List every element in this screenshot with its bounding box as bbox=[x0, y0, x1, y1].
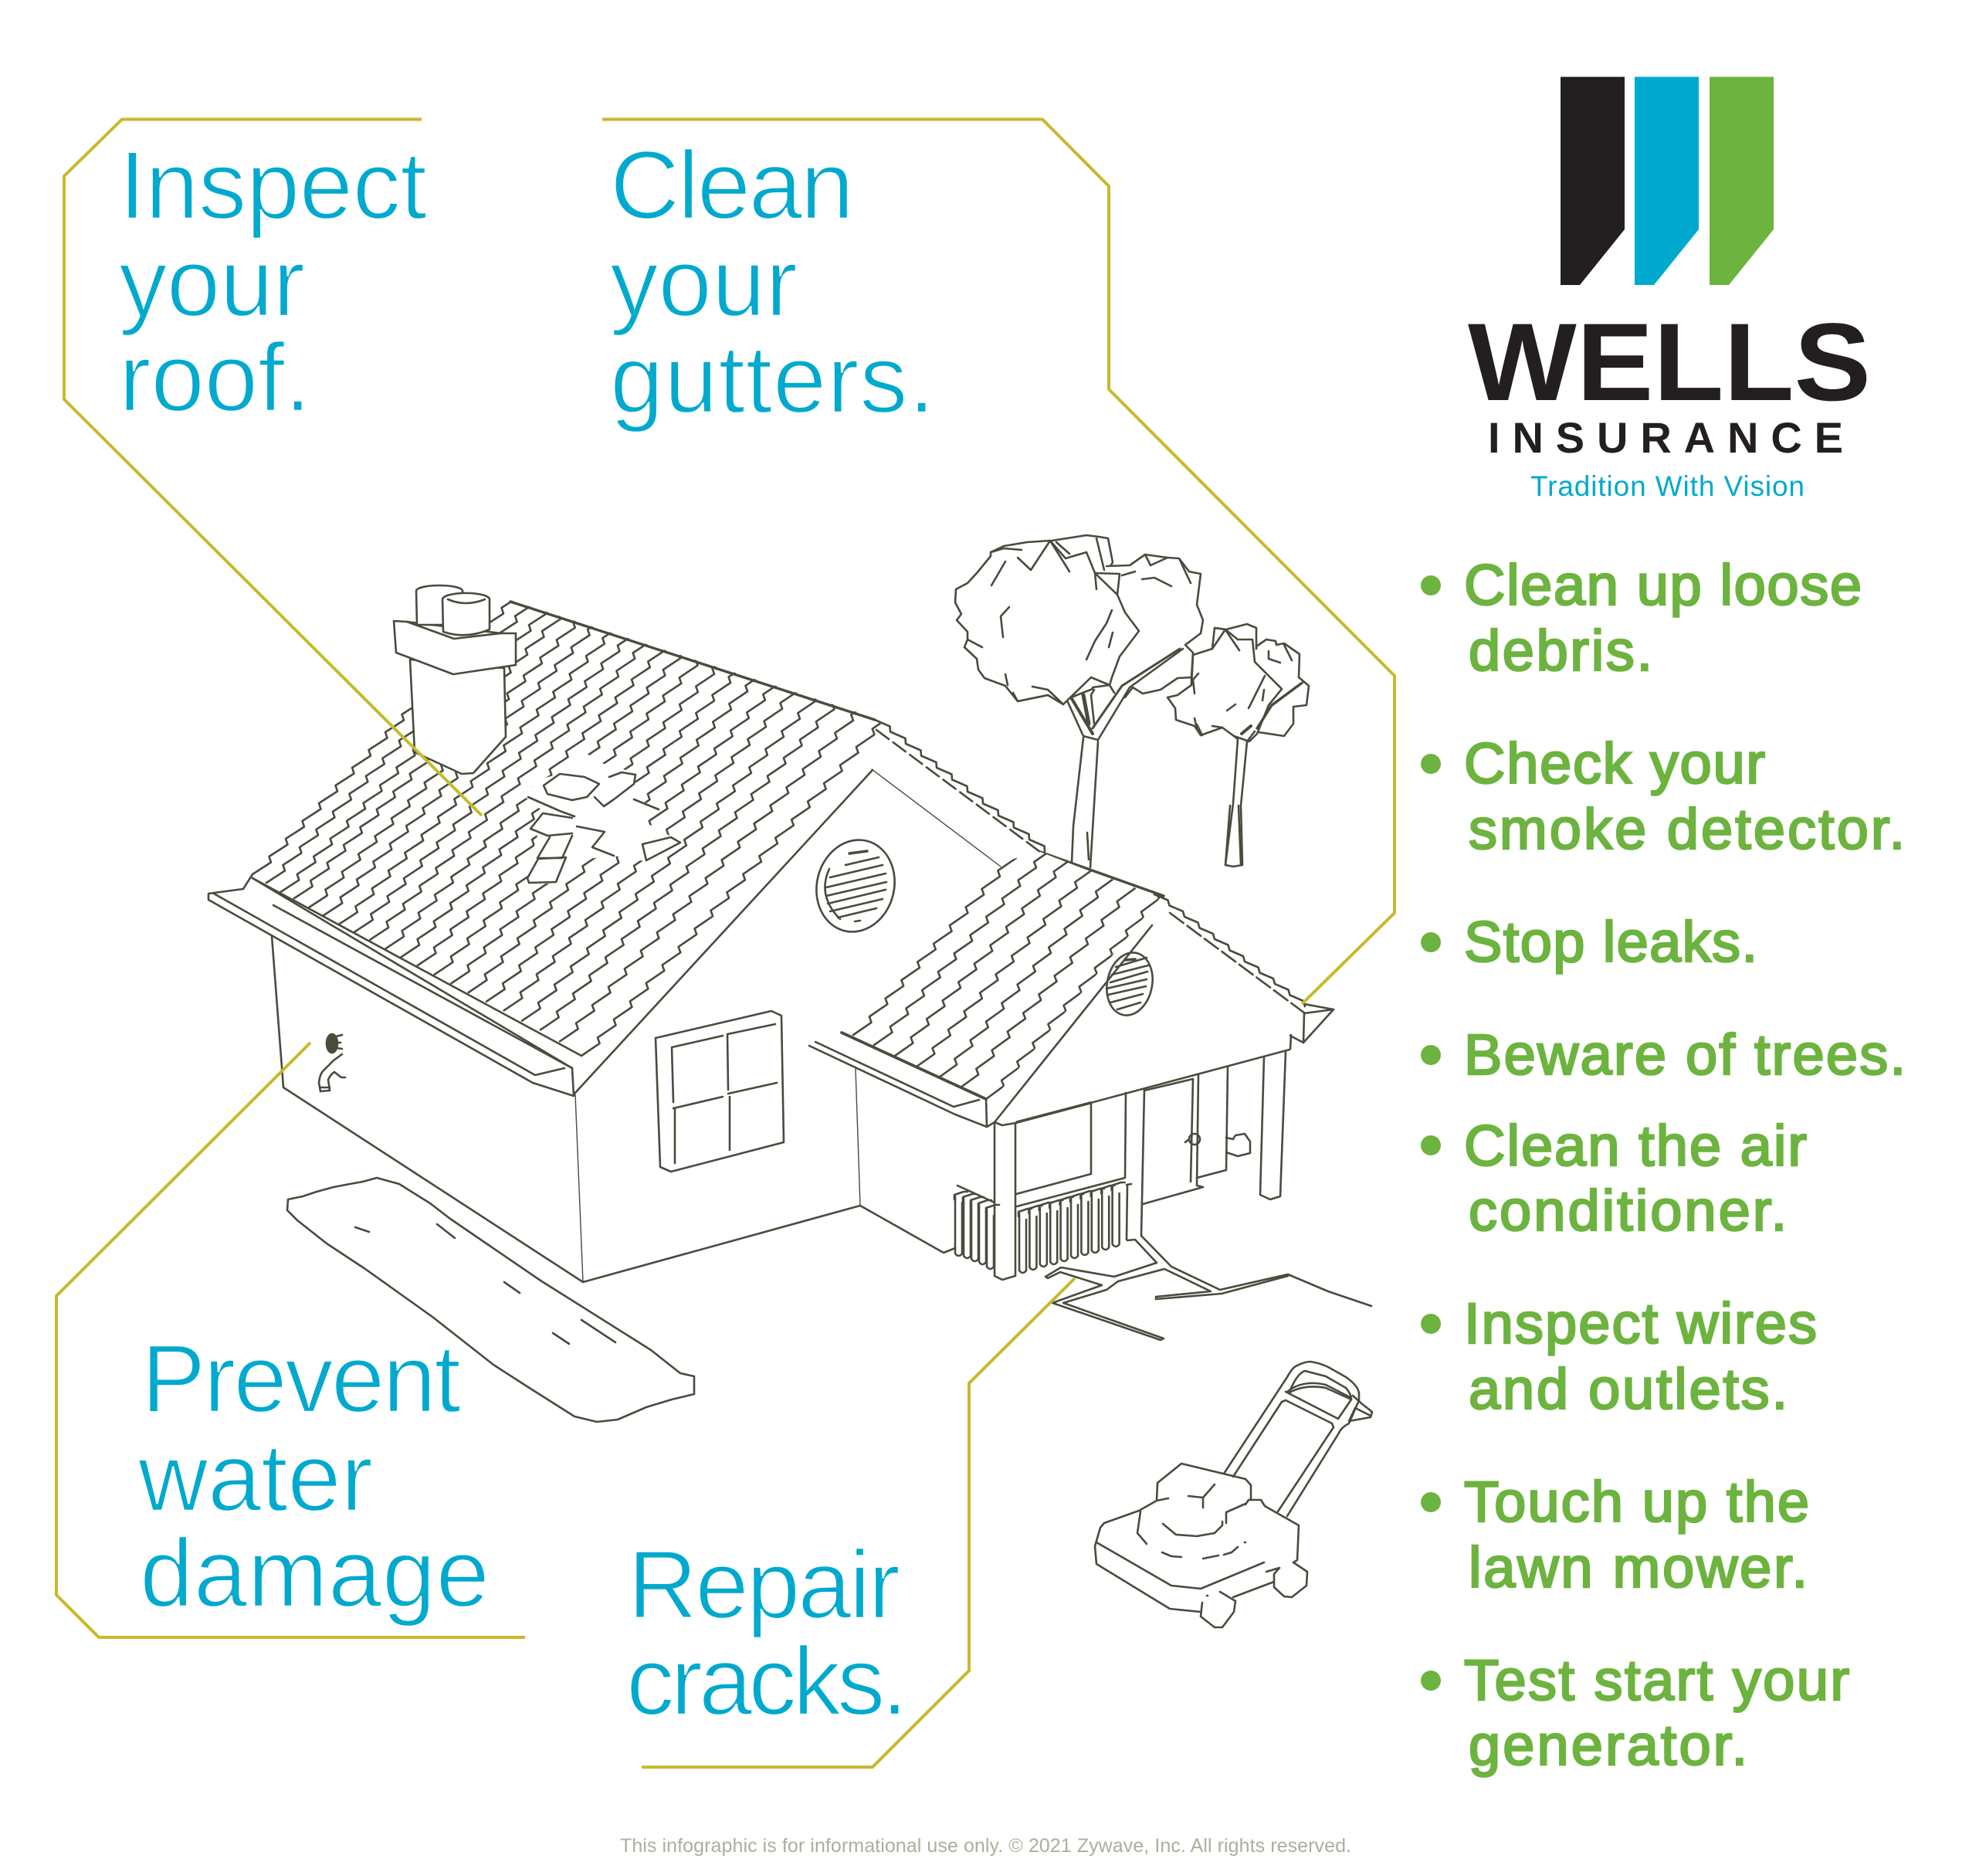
tree canopy: small bbox=[1168, 629, 1282, 741]
list item: stop leaks: Stop leaks. bbox=[1464, 910, 1757, 974]
heading: repair cracks bbox=[626, 1532, 908, 1735]
callout frame: prevent water damage bbox=[56, 1043, 525, 1637]
main canopy details bbox=[968, 541, 1113, 704]
damaged roof patch bbox=[525, 752, 680, 884]
heading: inspect your roof: Inspect bbox=[119, 132, 427, 239]
checklist bbox=[1421, 553, 1906, 1777]
main gable eave steps bbox=[875, 720, 1164, 896]
logo mark: three bars bbox=[1561, 77, 1625, 285]
cracked walkway bbox=[1046, 1236, 1371, 1340]
list item: check smoke detector: smoke detector. bbox=[1469, 797, 1905, 861]
heading: prevent water damage bbox=[137, 1325, 490, 1627]
chimney bbox=[394, 585, 516, 774]
right canopy details bbox=[1095, 538, 1191, 695]
heading: clean your gutters: gutters. bbox=[610, 326, 935, 433]
list item: clean the air conditioner: Clean the air bbox=[1464, 1114, 1807, 1178]
list item: inspect wires and outlets: and outlets. bbox=[1469, 1357, 1788, 1421]
heading: clean your gutters: Clean bbox=[610, 132, 854, 239]
logo wordmark: WELLS bbox=[1468, 301, 1871, 424]
footer disclaimer: This infographic is for informational use only. © 2021 Zywave, Inc. All rights reserved. bbox=[620, 1835, 1351, 1857]
porch roof shingles bbox=[852, 853, 1160, 1100]
illustration: house bbox=[207, 584, 1334, 1284]
callout frame: inspect your roof bbox=[64, 119, 482, 816]
list item: check smoke detector bbox=[1421, 731, 1905, 861]
list item: touch up lawn mower: Touch up the bbox=[1464, 1470, 1809, 1534]
heading: prevent water damage: damage bbox=[140, 1520, 490, 1627]
main gable vent bbox=[807, 832, 904, 940]
list item: clean up loose debris: debris. bbox=[1469, 619, 1652, 683]
porch roof body bbox=[842, 852, 1156, 1099]
mower wheels bbox=[1201, 1562, 1307, 1627]
small porch gable vent bbox=[1101, 948, 1158, 1019]
heading: prevent water damage: Prevent bbox=[141, 1325, 461, 1433]
porch roof eave and gutter bbox=[809, 925, 1291, 1127]
list item: clean the air conditioner: conditioner. bbox=[1469, 1179, 1787, 1243]
main side and front walls bbox=[272, 769, 1001, 1282]
list item: test start generator bbox=[1421, 1648, 1849, 1777]
logo: Wells Insurance bbox=[1468, 77, 1871, 502]
heading: inspect your roof: roof. bbox=[119, 324, 311, 432]
logo subtitle: INSURANCE bbox=[1488, 413, 1843, 462]
garden bed plank bbox=[287, 1178, 694, 1422]
list item: touch up lawn mower bbox=[1421, 1470, 1809, 1600]
tree trunks and branches bbox=[1067, 649, 1255, 867]
icon: water faucet bbox=[319, 1034, 345, 1091]
list item: clean up loose debris: Clean up loose bbox=[1464, 553, 1862, 617]
gutter main bbox=[208, 874, 581, 1096]
illustration: trees bbox=[955, 535, 1309, 867]
list item: touch up lawn mower: lawn mower. bbox=[1469, 1535, 1808, 1600]
heading: repair cracks: Repair bbox=[628, 1532, 900, 1639]
small canopy details bbox=[1193, 628, 1303, 735]
list item: inspect wires and outlets bbox=[1421, 1291, 1817, 1421]
list item: inspect wires and outlets: Inspect wires bbox=[1464, 1291, 1817, 1355]
tree canopy: top lump small bbox=[1215, 624, 1256, 649]
heading: prevent water damage: water bbox=[137, 1424, 373, 1532]
window bbox=[656, 1011, 784, 1172]
callout frame: clean your gutters bbox=[602, 119, 1395, 1004]
lawn mower bbox=[1095, 1362, 1372, 1627]
mower engine bbox=[1157, 1464, 1251, 1501]
main roof shingles bbox=[252, 600, 881, 1057]
heading: clean your gutters bbox=[610, 132, 935, 433]
list item: test start generator: generator. bbox=[1469, 1713, 1747, 1777]
list item: check smoke detector: Check your bbox=[1464, 731, 1765, 796]
tree canopy: main bbox=[955, 541, 1139, 704]
vent slats bbox=[1107, 958, 1148, 1009]
porch posts and door bbox=[995, 1052, 1286, 1280]
chimney pot: back bbox=[416, 585, 463, 625]
roof ridge bbox=[510, 602, 875, 720]
list item: clean the air conditioner bbox=[1421, 1114, 1807, 1243]
mower handle bbox=[1224, 1362, 1372, 1516]
mower deck bbox=[1095, 1501, 1201, 1612]
list item: clean up loose debris bbox=[1421, 553, 1862, 683]
heading: repair cracks: cracks. bbox=[626, 1628, 908, 1735]
tree canopy: right bbox=[1107, 555, 1203, 697]
porch gable eave and end gutter bbox=[1154, 894, 1334, 1043]
list item: beware of trees: Beware of trees. bbox=[1464, 1023, 1906, 1087]
tree canopy: back small bbox=[1256, 639, 1309, 736]
heading: clean your gutters: your bbox=[610, 229, 798, 337]
mower details bbox=[1163, 1521, 1222, 1536]
list item: test start generator: Test start your bbox=[1464, 1648, 1849, 1712]
logo tagline: Tradition With Vision bbox=[1530, 470, 1805, 502]
heading: inspect your roof bbox=[119, 132, 427, 432]
heading: inspect your roof: your bbox=[119, 229, 305, 337]
chimney pot: front bbox=[442, 593, 490, 635]
tree canopy: back lumps bbox=[1052, 535, 1113, 568]
porch fence bbox=[954, 1182, 1131, 1273]
house wall mass bbox=[272, 722, 1304, 1282]
callout frame: repair cracks bbox=[642, 1278, 1075, 1767]
